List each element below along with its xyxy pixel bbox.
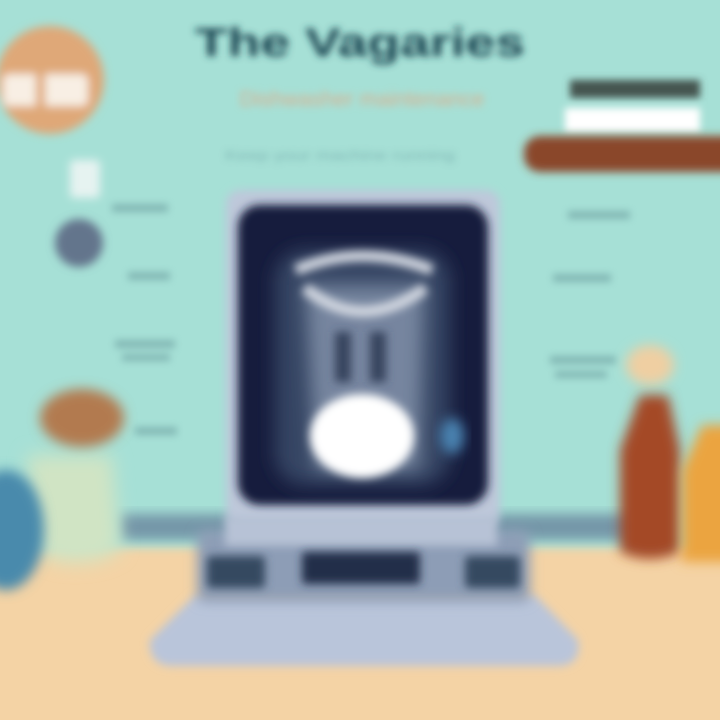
bottom plinth bbox=[150, 595, 579, 666]
control slot right bbox=[465, 556, 520, 588]
dishwasher bbox=[150, 190, 579, 666]
jar with lid bbox=[28, 389, 124, 563]
caption line: Keep your machine running bbox=[225, 147, 455, 163]
icon: gray dial bbox=[55, 219, 103, 267]
white dish bbox=[310, 394, 414, 478]
basket dark slots bbox=[335, 332, 386, 382]
jar body bbox=[28, 455, 120, 563]
wooden table bbox=[0, 548, 720, 720]
outer door frame bbox=[226, 190, 500, 525]
blue accent bbox=[440, 418, 464, 454]
subtitle: Dishwasher maintenance bbox=[240, 88, 484, 111]
inner glow bbox=[275, 250, 450, 485]
dark interior bbox=[238, 205, 488, 505]
brown lid bbox=[40, 389, 124, 447]
bottle cap bbox=[626, 345, 674, 385]
right labels bbox=[550, 211, 630, 378]
title: The Vagaries bbox=[195, 21, 525, 65]
orange bottle bbox=[682, 425, 720, 562]
panel: top-right banner bbox=[524, 80, 720, 172]
baseboard strip bbox=[120, 514, 640, 540]
basket bbox=[305, 285, 425, 470]
banner heading bbox=[565, 80, 700, 132]
badge: orange circle bbox=[0, 26, 104, 134]
bottles bbox=[620, 345, 720, 562]
icon: small white tag bbox=[70, 160, 100, 198]
brown bottle bbox=[620, 395, 680, 559]
blue vase bbox=[0, 470, 44, 590]
lower body bbox=[197, 530, 530, 602]
control slot centre bbox=[302, 552, 420, 584]
control slot left bbox=[207, 556, 265, 588]
control panel band bbox=[225, 516, 497, 546]
brown shelf bbox=[524, 136, 720, 172]
left labels bbox=[112, 204, 177, 435]
white arc bbox=[296, 256, 432, 312]
